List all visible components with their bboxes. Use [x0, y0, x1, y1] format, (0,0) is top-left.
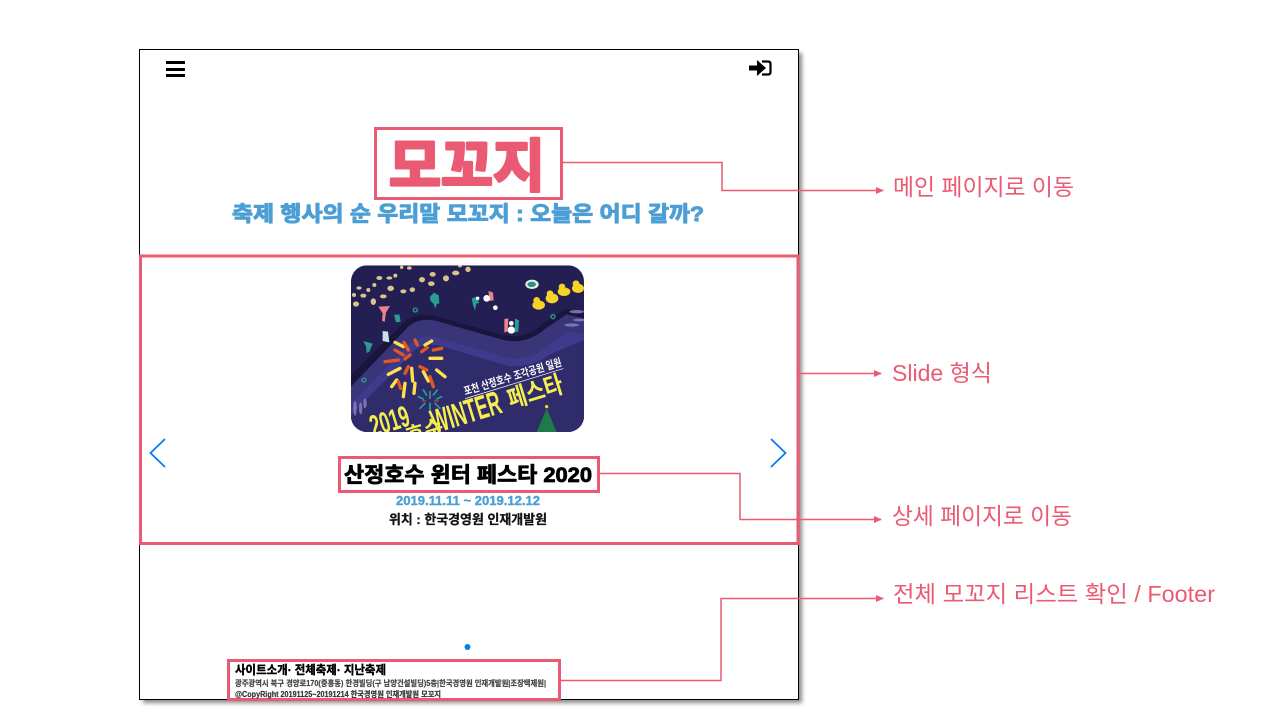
icon: hamburger menu — [166, 61, 185, 77]
festival location: 위치 : 한국경영원 인재개발원 — [389, 512, 547, 527]
feathers — [353, 310, 585, 416]
rubber ducks — [532, 280, 584, 310]
icon: next arrow — [771, 439, 786, 467]
label: slide format: Slide 형식 — [892, 360, 992, 386]
label: detail page: 상세 페이지로 이동 — [892, 503, 1072, 529]
footer block — [228, 660, 560, 700]
label: main page: 메인 페이지로 이동 — [893, 174, 1074, 200]
festival poster image: 페스타 — [504, 371, 567, 414]
icon: previous arrow — [150, 439, 165, 467]
festival poster image: 호수 — [403, 415, 446, 448]
fireworks — [388, 341, 445, 397]
label: full list and footer: 전체 모꼬지 리스트 확인 / Footer — [893, 581, 1215, 607]
tree — [537, 408, 557, 432]
footer block: @CopyRight 20191125~20191214 한국경영원 인재개발원 모꼬지 — [235, 689, 441, 699]
festival poster image — [351, 265, 585, 448]
arrow: footer list — [561, 598, 883, 680]
poster lettering — [461, 355, 563, 399]
panel: slide — [140, 256, 798, 544]
arrow: detail page — [599, 474, 881, 520]
arrow: slide format — [799, 372, 881, 374]
festival dates: 2019.11.11 ~ 2019.12.12 — [396, 493, 540, 508]
pagination dot — [464, 644, 470, 650]
skaters — [363, 293, 519, 353]
icon: login — [749, 60, 770, 76]
footer block: 사이트소개· 전체축제· 지난축제 — [235, 662, 386, 677]
arrow: logo to main page — [563, 162, 883, 190]
subtitle: 축제 행사의 순 우리말 모꼬지 : 오늘은 어디 갈까? — [232, 203, 704, 226]
festival poster image: 2019 — [366, 400, 414, 443]
poster lettering: 포천 산정호수 조각공원 일원 — [462, 355, 563, 398]
phone frame — [140, 50, 802, 703]
wreaths — [362, 308, 555, 382]
festival name — [340, 458, 598, 492]
festival poster image: WINTER — [427, 385, 506, 441]
footer block: 광주광역시 북구 경양로170(중흥동) 한경빌딩(구 남양건설빌딩)5층|한국경영원 인재개발원|조장택제원| — [235, 678, 546, 688]
festival name: 산정호수 윈터 페스타 2020 — [344, 464, 592, 487]
string lights — [352, 265, 471, 307]
logo title: 모꼬지 — [389, 135, 545, 199]
